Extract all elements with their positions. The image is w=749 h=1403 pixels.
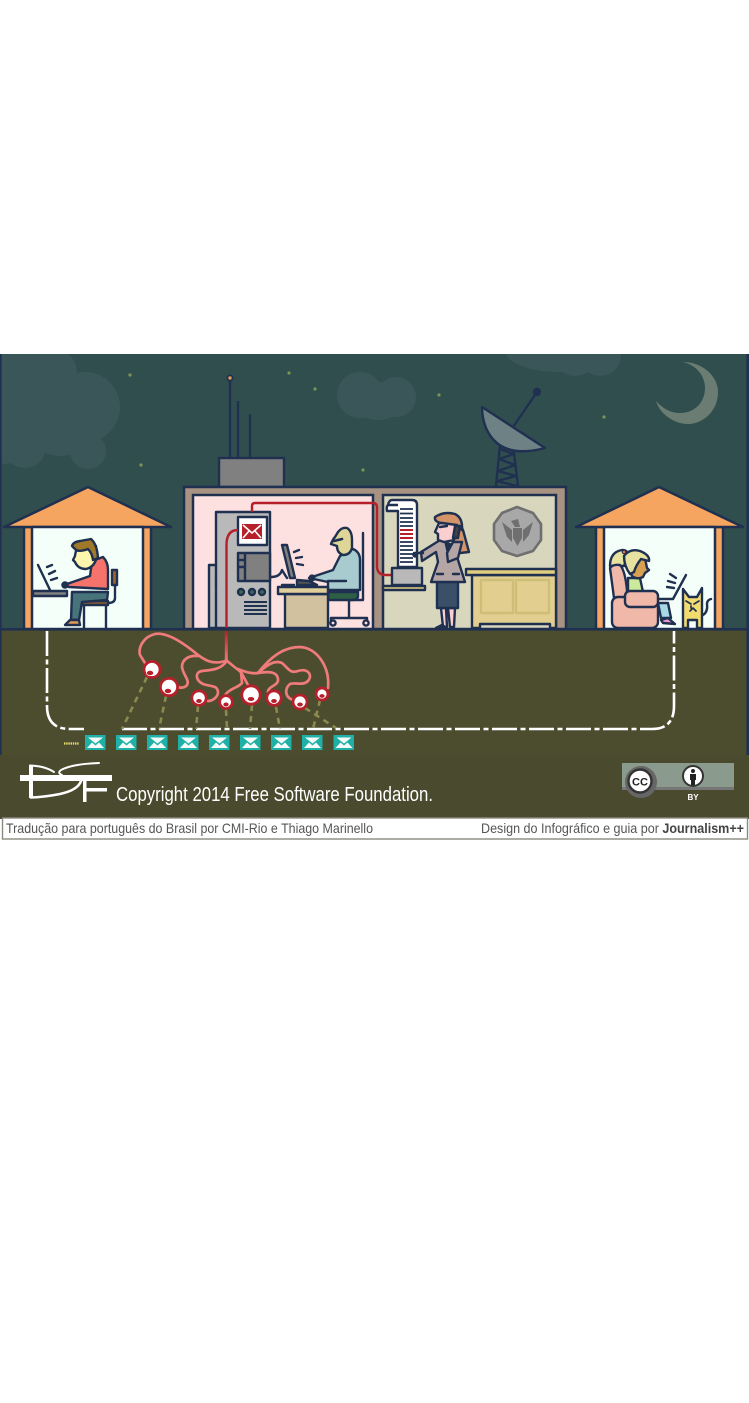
agent on phone [414,513,469,628]
satellite dish [482,389,545,486]
cable route dash-dot [47,631,674,729]
cat [683,588,711,628]
person with laptop [33,539,117,628]
room: mail server [193,495,373,629]
person in armchair [610,550,686,628]
tentacles [140,634,328,701]
icon: red envelope [242,524,262,539]
government seal [494,507,541,556]
office building [184,487,566,629]
right house [576,487,743,629]
translation credit: Tradução para português do Brasil por CMI-Rio e Thiago Marinello [6,820,373,836]
credits bar [2,818,748,839]
room: agent [383,495,556,629]
eagle [502,519,533,546]
office worker at desk [271,528,369,628]
ground line [0,628,749,631]
CC BY badge [622,763,734,802]
underground [0,630,749,756]
copyright text: Copyright 2014 Free Software Foundation. [116,784,433,806]
crescent moon [656,362,718,424]
server cabinet [209,512,270,628]
clouds [2,354,621,469]
FSF logo [20,763,112,802]
tapping dashed lines [122,677,336,729]
night sky [0,354,749,630]
CC BY badge: BY [687,793,699,802]
scroll printer [383,500,425,590]
surveillance eyes [144,662,328,709]
red cables [226,503,392,630]
envelopes [85,735,354,750]
yellow dots leading in [64,742,79,745]
CC BY badge: CC [632,776,648,788]
left house [4,487,171,629]
antennas [230,378,250,458]
eye pupils [146,670,325,707]
design credit: Design do Infográfico e guia por Journalism++ [481,820,744,836]
tentacle stem [225,631,228,661]
cabinet [466,569,556,629]
scene side borders [0,354,749,756]
footer band [0,755,749,819]
stars [128,371,606,472]
rooftop equipment [219,375,284,487]
